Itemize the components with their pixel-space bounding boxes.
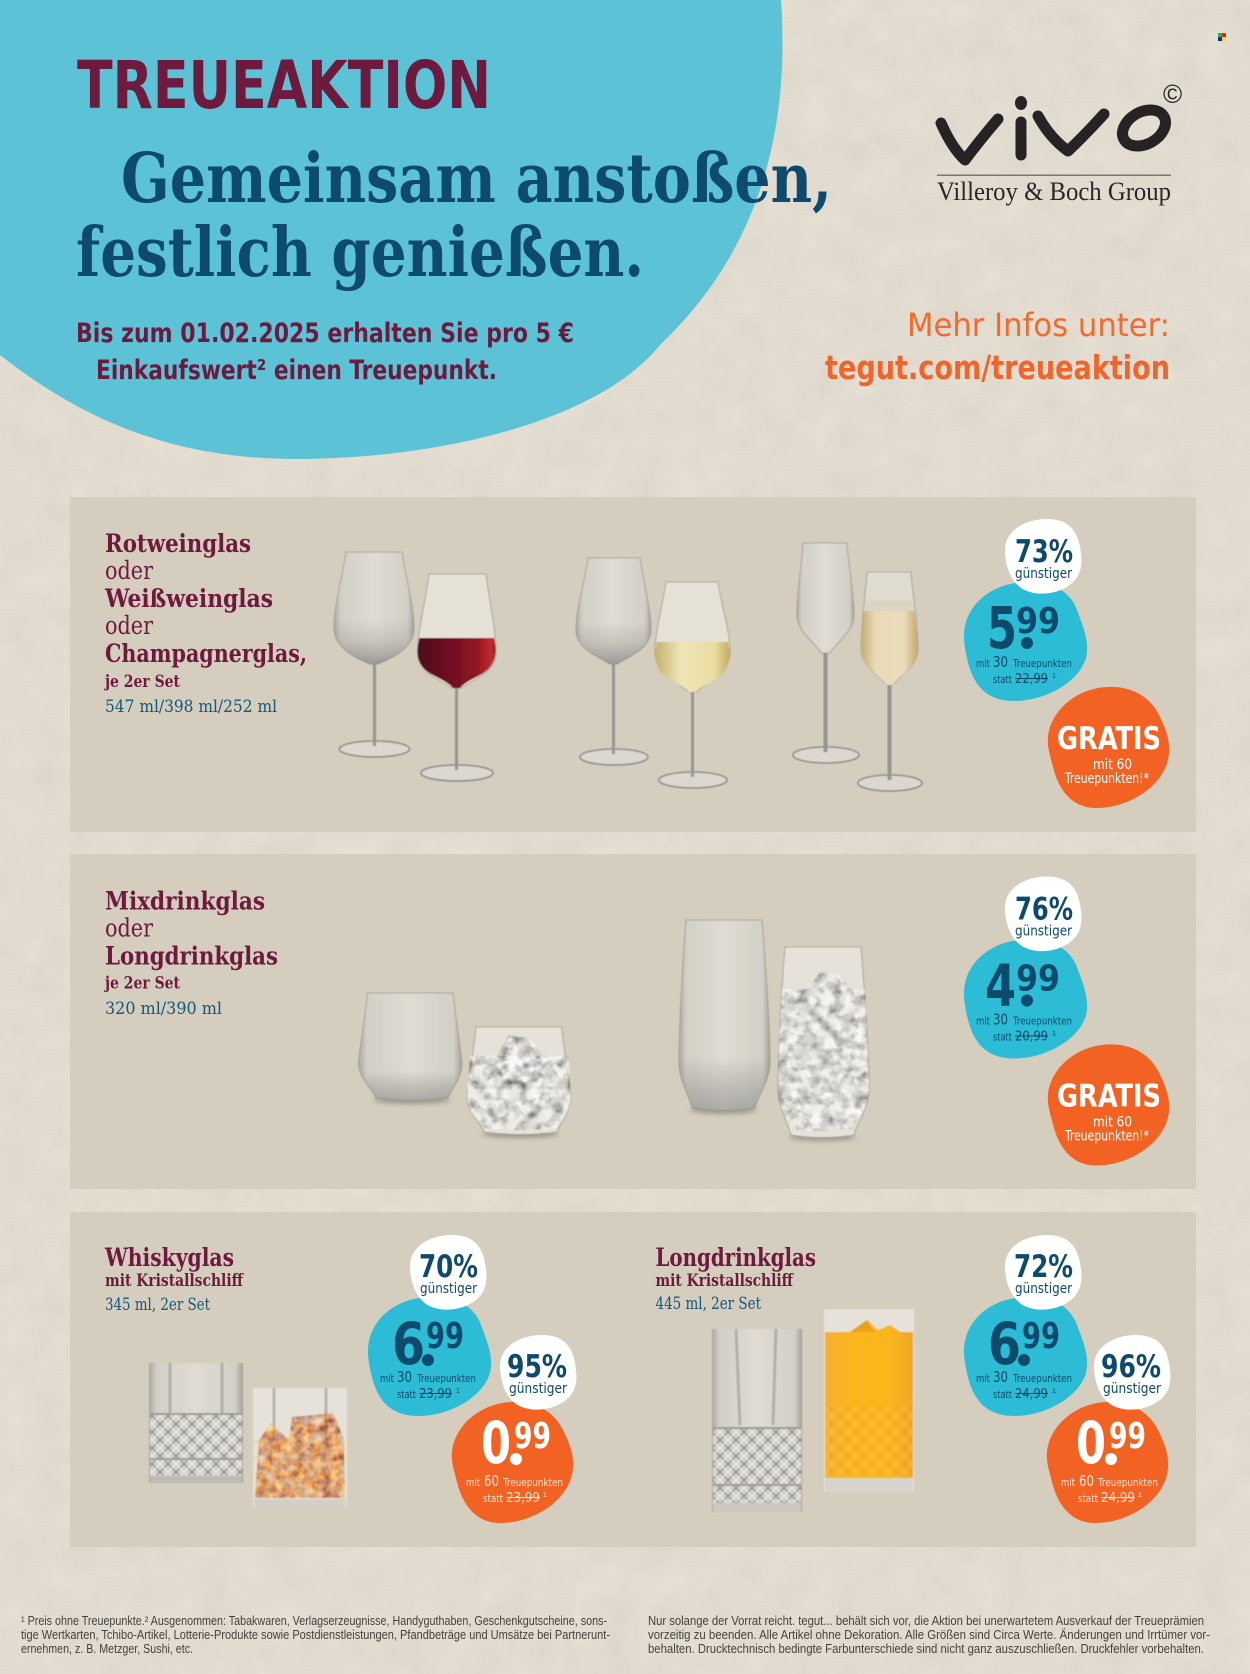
panel: crystal cut glasses bbox=[70, 1212, 1196, 1547]
headline bbox=[76, 139, 832, 293]
price badge: teal 5.99: 22,99 bbox=[1015, 672, 1048, 687]
product text: whisky glass: mit Kristallschliff bbox=[105, 1271, 244, 1290]
mixdrink tumbler pair bbox=[358, 993, 570, 1138]
price badge: teal 4.99: 30 bbox=[993, 1010, 1008, 1028]
price badge: teal 6.99: mit bbox=[380, 1373, 394, 1385]
price badge: teal 6.99: 24,99 bbox=[1015, 1387, 1048, 1402]
discount badge: 76%: 76% bbox=[1015, 892, 1073, 928]
discount badge: 72%: 72% bbox=[1014, 1249, 1073, 1285]
price badge: orange 0.99: 99 bbox=[514, 1416, 551, 1457]
price badge: teal 6.99: Treuepunkten bbox=[416, 1373, 476, 1385]
discount badge: 95%: günstiger bbox=[509, 1381, 568, 1397]
price badge: orange 0.99: Treuepunkten bbox=[1097, 1477, 1158, 1489]
price badge: teal 4.99: 4 bbox=[985, 952, 1016, 1020]
product text: crystal longdrink glass: Longdrinkglas bbox=[656, 1243, 816, 1272]
price badge: teal 5.99: 5 bbox=[987, 594, 1017, 662]
product text: mixdrink and longdrink: oder bbox=[105, 914, 153, 942]
panel: wine glasses bbox=[70, 497, 1196, 832]
price badge: orange 0.99: statt bbox=[1078, 1493, 1098, 1505]
logo: vivo Villeroy & Boch Group: © bbox=[1163, 79, 1182, 109]
icon: colour control mark bbox=[1218, 33, 1226, 41]
product text: mixdrink and longdrink: je 2er Set bbox=[103, 974, 180, 994]
price badge: orange 0.99: 1 bbox=[1138, 1491, 1142, 1499]
price badge: orange 0.99: mit bbox=[466, 1477, 480, 1489]
headline: festlich genießen. bbox=[76, 213, 644, 293]
price badge: teal 6.99: 23,99 bbox=[419, 1387, 452, 1402]
product text: whisky glass: 345 ml, 2er Set bbox=[105, 1295, 211, 1315]
price badge: teal 4.99: mit bbox=[976, 1016, 990, 1028]
product text: crystal longdrink glass: mit Kristallschliff bbox=[656, 1271, 794, 1290]
price badge: teal 5.99: 30 bbox=[993, 653, 1008, 671]
price badge: teal 4.99: 20,99 bbox=[1015, 1030, 1048, 1044]
discount badge: 73%: 73% bbox=[1015, 534, 1073, 570]
discount badge: 96%: 96% bbox=[1101, 1349, 1161, 1385]
logo: vivo Villeroy & Boch Group bbox=[937, 79, 1182, 206]
discount badge: 70%: günstiger bbox=[420, 1281, 478, 1297]
footnotes left: tige Wertkarten, Tchibo-Artikel, Lotterie-Produkte sowie Postdienstleistungen, Pfandbeträge und Umsätze bei Partnerunt- bbox=[21, 1628, 610, 1642]
price badge: teal 6.99: 99 bbox=[1022, 1316, 1060, 1357]
price badge: orange 0.99: 60 bbox=[484, 1472, 499, 1490]
free badge: GRATIS: GRATIS bbox=[1057, 1078, 1161, 1114]
more info link: tegut.com/treueaktion bbox=[825, 348, 1170, 387]
price badge: teal 5.99: statt bbox=[993, 674, 1012, 686]
product text: wine glasses: je 2er Set bbox=[103, 672, 180, 692]
free badge: GRATIS: mit 60 bbox=[1093, 1114, 1132, 1130]
product text: wine glasses: Champagnerglas, bbox=[105, 639, 307, 668]
footnotes right bbox=[648, 1614, 1210, 1656]
product text: wine glasses: Weißweinglas bbox=[104, 584, 273, 613]
price badge: teal 6.99: 30 bbox=[993, 1368, 1008, 1386]
champagne glass pair bbox=[793, 543, 922, 791]
product text: mixdrink and longdrink: Mixdrinkglas bbox=[105, 886, 265, 916]
price badge: orange 0.99: 1 bbox=[543, 1491, 547, 1499]
price badge: orange 0.99: 23,99 bbox=[506, 1491, 540, 1506]
product text: mixdrink and longdrink: 320 ml/390 ml bbox=[105, 999, 222, 1019]
discount badge: 73% bbox=[1005, 519, 1081, 594]
product text: mixdrink and longdrink bbox=[103, 886, 278, 1019]
price badge: orange 0.99: statt bbox=[483, 1493, 503, 1505]
price badge: teal 4.99: Treuepunkten bbox=[1012, 1016, 1072, 1028]
price badge: teal 6.99: 1 bbox=[456, 1387, 460, 1395]
price badge: orange 0.99: mit bbox=[1061, 1477, 1075, 1489]
price badge: orange 0.99 bbox=[1047, 1402, 1168, 1523]
price badge: teal 6.99 bbox=[368, 1297, 491, 1416]
loyalty condition text: Einkaufswert² einen Treuepunkt. bbox=[96, 355, 497, 386]
product text: mixdrink and longdrink: Longdrinkglas bbox=[105, 942, 278, 970]
footnotes right: vorzeitig zu beenden. Alle Artikel ohne Dekoration. Alle Größen sind Circa Werte. Änderungen und Irrtümer vor- bbox=[648, 1628, 1210, 1642]
whisky glass pair bbox=[149, 1363, 347, 1508]
longdrink pair bbox=[679, 920, 869, 1141]
red wine glass pair bbox=[334, 552, 496, 781]
product text: wine glasses: oder bbox=[105, 556, 153, 585]
price badge: orange 0.99: 24,99 bbox=[1101, 1491, 1135, 1506]
discount badge: 70% bbox=[410, 1235, 486, 1310]
discount badge: 70%: 70% bbox=[419, 1249, 478, 1285]
discount badge: 95% bbox=[500, 1335, 576, 1410]
free badge: GRATIS: Treuepunkten!* bbox=[1064, 771, 1149, 787]
title: TREUEAKTION bbox=[77, 47, 491, 124]
discount badge: 76% bbox=[1005, 876, 1081, 951]
footnotes left bbox=[21, 1614, 610, 1656]
free badge: GRATIS bbox=[1048, 687, 1169, 808]
price badge: teal 5.99: 1 bbox=[1052, 672, 1056, 680]
product text: whisky glass bbox=[104, 1243, 244, 1315]
price badge: orange 0.99: 60 bbox=[1079, 1472, 1094, 1490]
teal header blob bbox=[0, 0, 783, 459]
panel: mixdrink and longdrink glasses bbox=[70, 854, 1196, 1189]
price badge: teal 4.99: 1 bbox=[1052, 1030, 1056, 1038]
price badge: orange 0.99: 0 bbox=[1076, 1409, 1106, 1477]
price badge: teal 6.99: 6 bbox=[392, 1310, 425, 1378]
price badge: teal 5.99: mit bbox=[976, 658, 990, 670]
footnotes left: ¹ Preis ohne Treuepunkte.² Ausgenommen: Tabakwaren, Verlagserzeugnisse, Handyguthaben, Geschenkgutscheine, sons- bbox=[21, 1614, 607, 1628]
discount badge: 72%: günstiger bbox=[1015, 1281, 1073, 1297]
white wine glass pair bbox=[576, 558, 730, 788]
price badge: teal 4.99: 99 bbox=[1016, 958, 1060, 1000]
price badge: orange 0.99: 0 bbox=[481, 1409, 511, 1477]
price badge: teal 5.99: 99 bbox=[1016, 601, 1060, 642]
footnotes left: ernehmen, z. B. Metzger, Sushi, etc. bbox=[21, 1642, 193, 1656]
more info link: Mehr Infos unter: bbox=[907, 306, 1170, 344]
free badge: GRATIS: Treuepunkten!* bbox=[1064, 1128, 1149, 1144]
logo: vivo Villeroy & Boch Group: Villeroy & Boch Group bbox=[937, 177, 1171, 206]
product text: wine glasses: 547 ml/398 ml/252 ml bbox=[105, 697, 277, 717]
price badge: orange 0.99: Treuepunkten bbox=[502, 1477, 563, 1489]
price badge: teal 4.99 bbox=[964, 940, 1087, 1058]
product text: wine glasses: oder bbox=[105, 611, 153, 640]
free badge: GRATIS: GRATIS bbox=[1057, 721, 1161, 757]
product text: crystal longdrink glass: 445 ml, 2er Set bbox=[656, 1294, 762, 1314]
product text: whisky glass: Whiskyglas bbox=[104, 1243, 234, 1272]
price badge: teal 6.99: statt bbox=[993, 1389, 1012, 1401]
price badge: orange 0.99: 99 bbox=[1109, 1416, 1146, 1457]
price badge: teal 6.99 bbox=[964, 1297, 1087, 1416]
loyalty condition text: Bis zum 01.02.2025 erhalten Sie pro 5 € bbox=[76, 318, 574, 349]
loyalty condition text bbox=[76, 318, 574, 386]
more info link bbox=[825, 306, 1170, 387]
price badge: teal 6.99: statt bbox=[397, 1389, 416, 1401]
discount badge: 96% bbox=[1094, 1335, 1170, 1410]
discount badge: 95%: 95% bbox=[507, 1349, 567, 1385]
discount badge: 72% bbox=[1005, 1235, 1081, 1310]
price badge: teal 6.99: 30 bbox=[397, 1368, 412, 1386]
price badge: teal 6.99: Treuepunkten bbox=[1012, 1373, 1072, 1385]
price badge: teal 6.99: mit bbox=[976, 1373, 990, 1385]
price badge: teal 6.99: 99 bbox=[426, 1316, 464, 1357]
price badge: teal 5.99 bbox=[964, 582, 1087, 701]
footnotes right: behalten. Drucktechnisch bedingte Farbunterschiede sind nicht ganz auszuschließen. Druckfehler vorbehalten. bbox=[648, 1642, 1204, 1656]
price badge: teal 4.99: statt bbox=[993, 1032, 1012, 1044]
price badge: teal 6.99: 6 bbox=[988, 1310, 1021, 1378]
discount badge: 76%: günstiger bbox=[1015, 924, 1073, 940]
price badge: teal 5.99: Treuepunkten bbox=[1012, 658, 1072, 670]
price badge: orange 0.99 bbox=[452, 1402, 573, 1523]
discount badge: 96%: günstiger bbox=[1103, 1381, 1162, 1397]
crystal longdrink glass pair bbox=[712, 1309, 914, 1512]
product text: crystal longdrink glass bbox=[656, 1243, 816, 1314]
free badge: GRATIS bbox=[1048, 1044, 1169, 1166]
footnotes right: Nur solange der Vorrat reicht. tegut... behält sich vor, die Aktion bei unerwartetem Ausverkauf der Treueprämien bbox=[648, 1614, 1204, 1628]
free badge: GRATIS: mit 60 bbox=[1093, 757, 1132, 773]
product text: wine glasses bbox=[103, 529, 307, 717]
price badge: teal 6.99: 1 bbox=[1052, 1387, 1056, 1395]
headline: Gemeinsam anstoßen, bbox=[121, 139, 832, 219]
product text: wine glasses: Rotweinglas bbox=[105, 529, 251, 558]
discount badge: 73%: günstiger bbox=[1015, 566, 1073, 582]
